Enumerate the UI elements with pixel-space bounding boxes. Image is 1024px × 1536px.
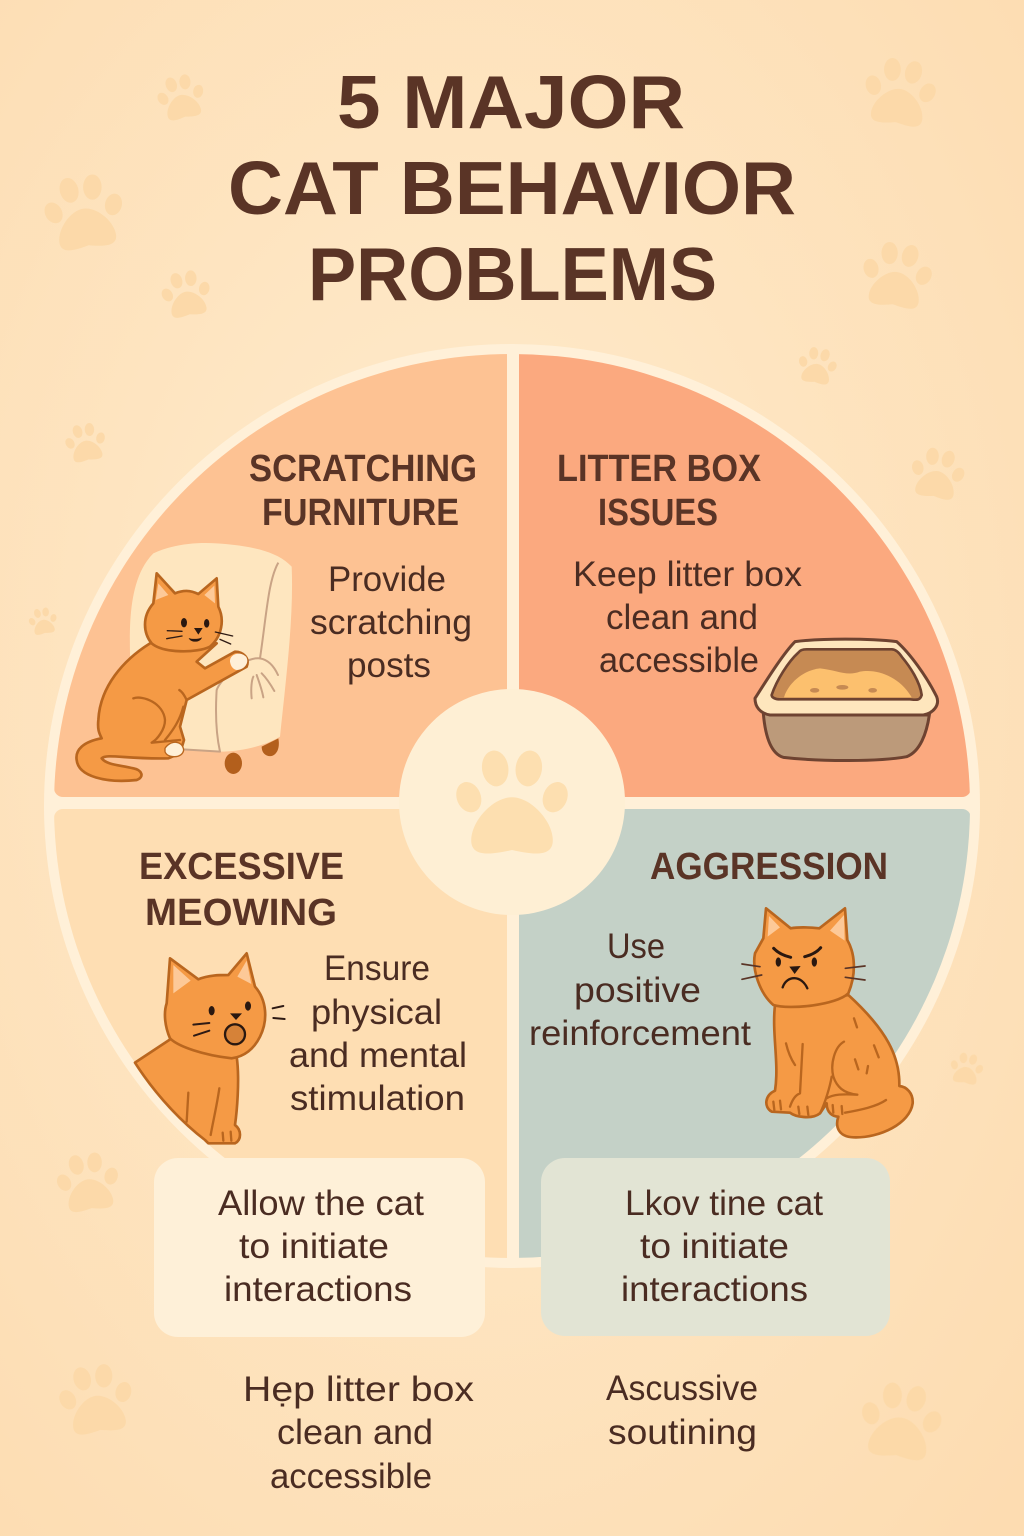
paw print [853, 1377, 949, 1464]
panel: excessive meowing [54, 809, 507, 1269]
paw print [856, 237, 938, 312]
heading: LITTER BOX [557, 448, 762, 490]
text block: bottom left: clean and [277, 1413, 433, 1452]
tip text: Ensure [324, 949, 430, 988]
paw print [905, 444, 970, 502]
tip text: Provide [328, 560, 446, 599]
panel: scratching furniture [54, 340, 507, 797]
tip text: posts [347, 646, 431, 685]
tip text: reinforcement [529, 1014, 751, 1053]
title: 5 MAJOR [337, 60, 685, 144]
panel content: scratching furniture [76, 448, 477, 781]
heading: MEOWING [145, 892, 337, 934]
tip text: scratching [310, 603, 472, 642]
card: allow the cat: Allow the cat [218, 1184, 424, 1223]
text block: bottom right [606, 1369, 758, 1452]
heading: AGGRESSION [650, 846, 888, 888]
paw print [51, 1148, 125, 1215]
panel: aggression [519, 809, 971, 1269]
illustration: meowing cat [135, 953, 285, 1143]
card: lkov tine cat: Lkov tine cat [625, 1184, 823, 1223]
card: allow the cat: to initiate [239, 1227, 389, 1266]
illustration: litter box [755, 639, 938, 761]
paw print [156, 267, 216, 320]
card: lkov tine cat: interactions [621, 1270, 808, 1309]
heading: EXCESSIVE [139, 846, 344, 888]
paw print [61, 420, 110, 464]
text block: bottom left [243, 1370, 475, 1496]
text block: bottom left: Hẹp litter box [243, 1370, 475, 1409]
card: lkov tine cat [541, 1158, 890, 1336]
card: allow the cat [154, 1158, 485, 1337]
paw print [947, 1050, 987, 1086]
panel content: aggression [529, 846, 913, 1137]
tip text: stimulation [290, 1079, 465, 1118]
title [228, 60, 796, 316]
tip text: accessible [599, 641, 759, 680]
title: CAT BEHAVIOR [228, 146, 796, 230]
title: PROBLEMS [308, 232, 717, 316]
paw print [26, 605, 60, 636]
circle backing ring [44, 344, 980, 1268]
paw print [52, 1359, 139, 1438]
paw print [152, 70, 210, 123]
text block: bottom right: soutining [608, 1413, 757, 1452]
heading [557, 448, 762, 534]
panel content: excessive meowing [135, 846, 467, 1143]
panel: litter box issues [519, 340, 971, 797]
tip text [310, 560, 472, 685]
text block: bottom left: accessible [270, 1457, 432, 1496]
quadrants [54, 340, 971, 1269]
paw print [794, 344, 841, 386]
heading: SCRATCHING [249, 448, 477, 490]
illustration: angry cat [742, 908, 913, 1137]
illustration: cat scratching chair [76, 543, 292, 781]
text block: bottom right: Ascussive [606, 1369, 758, 1408]
tip text: and mental [289, 1036, 467, 1075]
paw print [37, 169, 131, 254]
tip text: physical [311, 993, 442, 1032]
heading [249, 448, 477, 534]
heading [139, 846, 344, 934]
tip text: clean and [606, 598, 758, 637]
tip text [529, 927, 751, 1053]
heading: ISSUES [598, 492, 718, 534]
heading: FURNITURE [262, 492, 459, 534]
tip text [289, 949, 467, 1118]
paw print [858, 53, 942, 130]
icon: center paw [452, 749, 572, 854]
tip text: Keep litter box [573, 555, 803, 594]
card: lkov tine cat: to initiate [640, 1227, 789, 1266]
panel content: litter box issues [557, 448, 938, 761]
tip text [573, 555, 803, 680]
card: allow the cat: interactions [224, 1270, 412, 1309]
tip text: Use [607, 927, 665, 966]
tip text: positive [574, 971, 701, 1010]
center hub [399, 689, 625, 915]
